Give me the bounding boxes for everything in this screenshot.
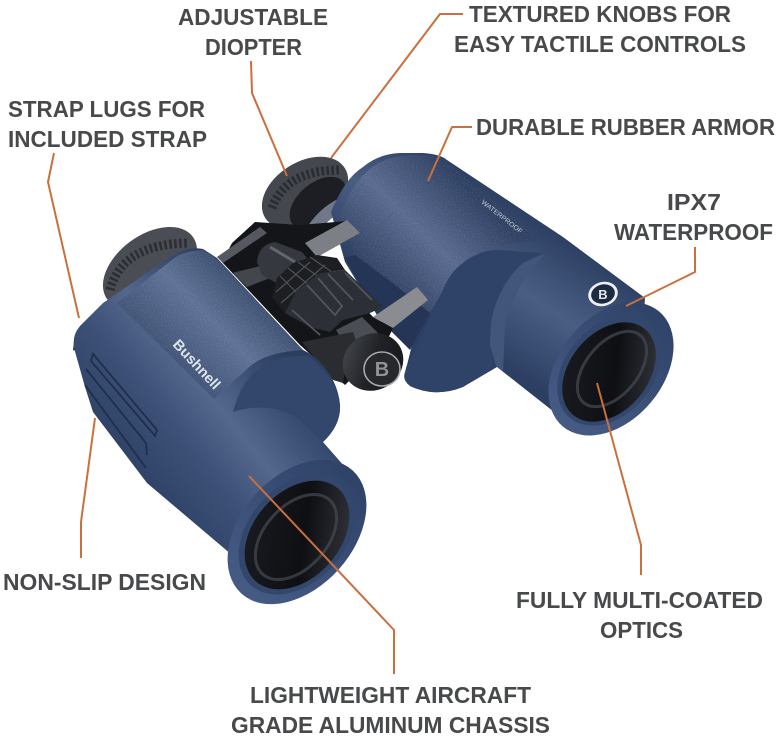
focus wheel knurl xyxy=(272,255,345,313)
model text: WATERPROOF xyxy=(480,199,524,235)
leader line xyxy=(597,383,641,575)
right hump xyxy=(404,250,543,392)
grip grooves xyxy=(85,354,157,468)
label: textured knobs: EASY TACTILE CONTROLS xyxy=(454,31,746,57)
upper shaft xyxy=(257,242,310,285)
callout: textured knobs xyxy=(331,1,746,158)
callout: lightweight aluminum chassis xyxy=(231,476,550,738)
right armor plate xyxy=(340,155,540,313)
lower arm xyxy=(302,332,357,383)
left barrel xyxy=(73,248,394,631)
label: adjustable diopter: ADJUSTABLE xyxy=(178,4,328,30)
leader line xyxy=(81,418,95,558)
callout: strap lugs xyxy=(8,96,207,318)
label: lightweight aluminum chassis: GRADE ALUMINUM CHASSIS xyxy=(231,712,550,738)
label: strap lugs: INCLUDED STRAP xyxy=(8,126,207,152)
leader line xyxy=(626,247,695,306)
left hump xyxy=(233,356,340,442)
label: non-slip design: NON-SLIP DESIGN xyxy=(3,569,206,595)
left objective ring xyxy=(200,433,394,631)
label: textured knobs: TEXTURED KNOBS FOR xyxy=(469,1,731,27)
barrel underside behind hinge xyxy=(345,255,430,350)
leader line xyxy=(331,14,463,158)
binoculars illustration xyxy=(73,142,699,631)
hinge cap with logo: B xyxy=(375,359,389,381)
focus wheel grip xyxy=(285,270,383,332)
right lens xyxy=(543,304,675,440)
callout: durable rubber armor xyxy=(428,114,775,181)
leader line xyxy=(251,61,287,176)
right badge xyxy=(585,279,621,309)
lower shaft xyxy=(336,317,378,345)
label: IPX7 waterproof: WATERPROOF xyxy=(614,219,773,245)
right eyepiece xyxy=(249,142,361,244)
Bushnell logo: Bushnell xyxy=(169,337,223,393)
label: fully multi-coated optics: FULLY MULTI-COATED xyxy=(516,587,763,613)
label: lightweight aluminum chassis: LIGHTWEIGHT AIRCRAFT xyxy=(250,682,531,708)
callout: IPX7 waterproof xyxy=(614,189,773,306)
leader line xyxy=(249,476,394,674)
hinge and focus wheel xyxy=(217,220,428,402)
right badge: B xyxy=(598,287,608,302)
right objective ring xyxy=(523,278,699,460)
label: adjustable diopter: DIOPTER xyxy=(205,34,302,60)
callout: non-slip design xyxy=(3,418,206,595)
leader line xyxy=(48,153,79,318)
left eyepiece xyxy=(88,210,212,326)
left armor plate xyxy=(117,250,303,399)
right barrel xyxy=(331,153,699,460)
left lens xyxy=(224,460,370,610)
leader line xyxy=(428,127,472,181)
label: fully multi-coated optics: OPTICS xyxy=(600,617,683,643)
strap lug xyxy=(73,322,90,352)
callout: adjustable diopter xyxy=(178,4,328,176)
hinge cap with logo xyxy=(332,322,414,402)
callout: fully multi-coated optics xyxy=(516,383,763,643)
label: strap lugs: STRAP LUGS FOR xyxy=(8,96,205,122)
label: durable rubber armor: DURABLE RUBBER ARMOR xyxy=(476,114,775,140)
upper hinge strips xyxy=(217,227,267,263)
label: IPX7 waterproof: IPX7 xyxy=(667,189,721,215)
